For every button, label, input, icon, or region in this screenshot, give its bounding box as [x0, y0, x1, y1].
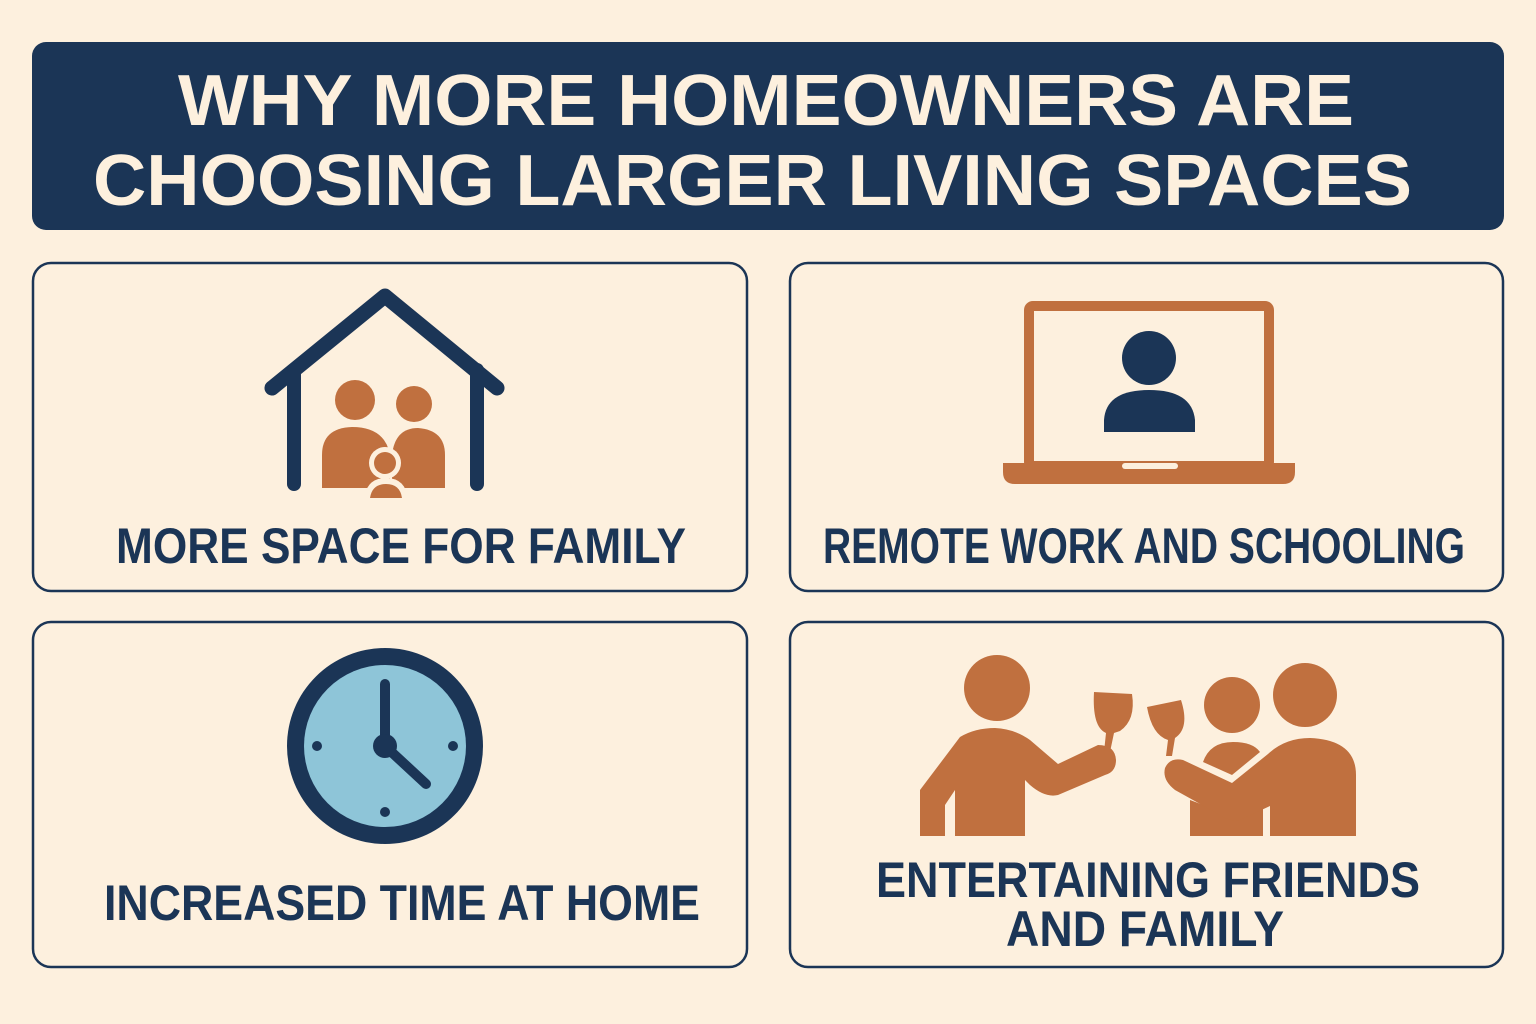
- label: ENTERTAINING FRIENDS: [876, 852, 1420, 908]
- panel: remote work: [790, 263, 1503, 591]
- icon: laptop with person: [1003, 306, 1295, 484]
- icon: house with family: [272, 296, 497, 500]
- title: [93, 61, 1412, 221]
- icon: clock: [287, 648, 483, 844]
- title banner: [32, 42, 1504, 230]
- label: MORE SPACE FOR FAMILY: [116, 518, 686, 574]
- icon: people toasting: [920, 655, 1356, 836]
- panel: more space for family: [33, 263, 747, 591]
- title: WHY MORE HOMEOWNERS ARE: [178, 61, 1354, 141]
- panel: entertaining: [790, 622, 1503, 967]
- title: CHOOSING LARGER LIVING SPACES: [93, 141, 1412, 221]
- label: AND FAMILY: [1006, 901, 1284, 957]
- label: [876, 852, 1420, 957]
- panel: increased time at home: [33, 622, 747, 967]
- label: INCREASED TIME AT HOME: [104, 875, 700, 931]
